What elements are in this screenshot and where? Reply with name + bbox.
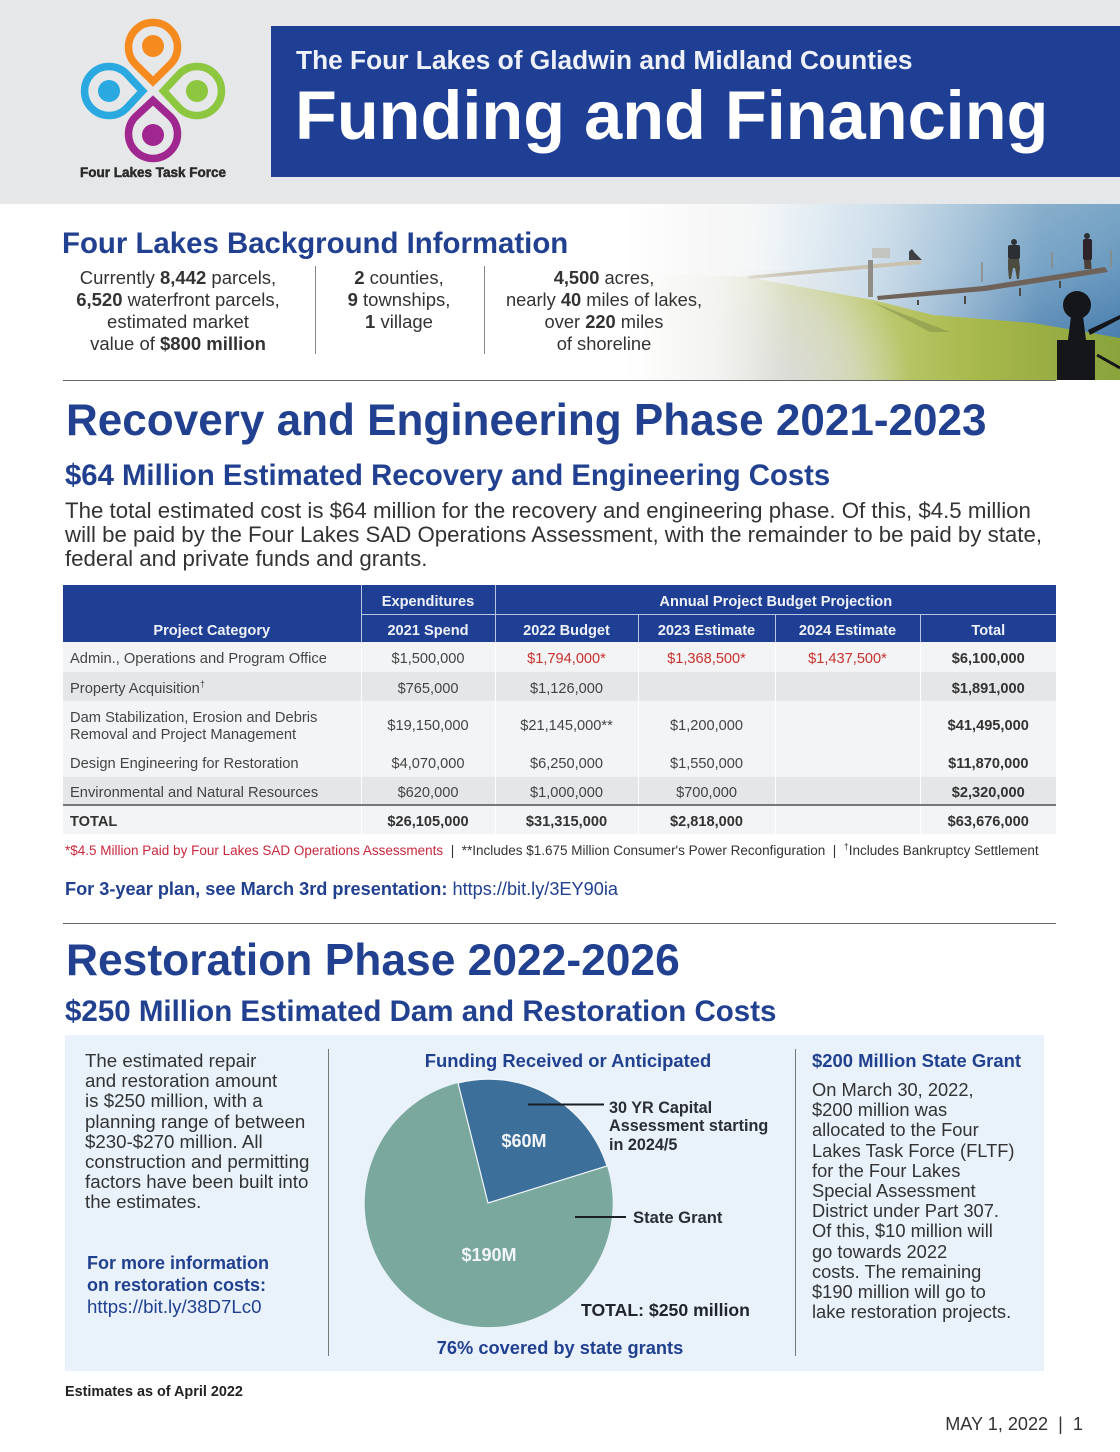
row: design: $11,870,000 bbox=[948, 756, 1028, 772]
foreground post and chain bbox=[1057, 291, 1120, 380]
subheading: restoration costs: $250 Million Estimated Dam and Restoration Costs bbox=[65, 995, 776, 1028]
row: total: $2,818,000 bbox=[670, 814, 743, 830]
text: state grant details: On March 30, 2022, bbox=[812, 1079, 974, 1100]
row: property: $1,126,000 bbox=[530, 680, 603, 696]
row: total: $26,105,000 bbox=[387, 814, 469, 830]
table footnotes: *$4.5 Million Paid by Four Lakes SAD Operations Assessments | **Includes $1.675 Million Consumer's Power Reconfiguration | †Includes Bankruptcy Settlement bbox=[65, 842, 1039, 858]
row: admin: $6,100,000 bbox=[952, 651, 1025, 667]
subtitle: The Four Lakes of Gladwin and Midland Counties bbox=[296, 45, 913, 75]
fisherman left bbox=[1008, 239, 1020, 279]
row: design: $6,250,000 bbox=[530, 756, 603, 772]
text: repair amount: the estimates. bbox=[85, 1191, 201, 1212]
text: repair amount: and restoration amount bbox=[85, 1070, 277, 1091]
callout: capital assessment: Assessment starting bbox=[609, 1117, 768, 1135]
text: state grant details: District under Part 307. bbox=[812, 1200, 999, 1221]
icon: green pin bbox=[164, 66, 221, 116]
text: repair amount: planning range of between bbox=[85, 1111, 305, 1132]
table header row: columns: 2022 Budget bbox=[523, 623, 610, 639]
table header row: columns: Total bbox=[971, 623, 1005, 639]
row: admin: $1,500,000 bbox=[391, 651, 465, 667]
paragraph: recovery description bbox=[65, 498, 1042, 571]
stat: acres: 4,500 acres, bbox=[554, 267, 654, 288]
stat: acres: over 220 miles bbox=[545, 311, 663, 332]
row: environmental: $2,320,000 bbox=[952, 784, 1025, 800]
link: restoration costs: on restoration costs: bbox=[87, 1275, 266, 1295]
stat: counties: 1 village bbox=[365, 311, 433, 332]
row: design bbox=[63, 747, 1056, 777]
near dock bbox=[877, 250, 1111, 305]
stat: acres: of shoreline bbox=[557, 333, 651, 354]
footer: date and page: MAY 1, 2022 | 1 bbox=[945, 1414, 1083, 1434]
pie slice: capital assessment bbox=[458, 1079, 607, 1203]
text: state grant details: Of this, $10 million will bbox=[812, 1220, 993, 1241]
icon: Four Lakes Task Force logo bbox=[80, 18, 227, 180]
row: dam: $19,150,000 bbox=[387, 718, 469, 734]
callout: capital assessment: 30 YR Capital bbox=[609, 1099, 712, 1117]
row: design: $4,070,000 bbox=[391, 756, 465, 772]
stat: parcels: Currently 8,442 parcels, bbox=[80, 267, 276, 288]
table header row: columns: 2024 Estimate bbox=[799, 623, 896, 639]
table header row: groups: Annual Project Budget Projection bbox=[659, 594, 892, 610]
link: 3-year plan: For 3-year plan, see March 3rd presentation: https://bit.ly/3EY90ia bbox=[65, 879, 618, 899]
row: admin bbox=[63, 642, 1056, 672]
text: state grant details: costs. The remaining bbox=[812, 1261, 981, 1282]
heading: background information: Four Lakes Background Information bbox=[62, 227, 568, 260]
table header row: columns bbox=[63, 614, 1056, 642]
row: environmental: Environmental and Natural Resources bbox=[70, 784, 318, 800]
heading: state grant: $200 Million State Grant bbox=[812, 1050, 1021, 1071]
icon: orange pin bbox=[128, 23, 178, 82]
row: environmental: $700,000 bbox=[676, 784, 737, 800]
row: admin: $1,794,000* bbox=[527, 651, 606, 667]
link: restoration costs: https://bit.ly/38D7Lc0 bbox=[87, 1296, 262, 1317]
stat: counties: 9 townships, bbox=[348, 289, 450, 310]
row: design: Design Engineering for Restoration bbox=[70, 756, 299, 772]
link: restoration costs: For more information bbox=[87, 1253, 269, 1273]
total label: TOTAL: $250 million bbox=[581, 1300, 750, 1320]
stat: acres bbox=[506, 267, 702, 354]
row: property: Property Acquisition† bbox=[70, 679, 205, 696]
row: dam bbox=[63, 701, 1056, 747]
table header row: groups: Expenditures bbox=[382, 594, 474, 610]
coverage note: 76% covered by state grants bbox=[437, 1337, 683, 1358]
fisherman right bbox=[1083, 233, 1092, 269]
row: environmental: $1,000,000 bbox=[530, 784, 603, 800]
fade overlay bbox=[620, 204, 795, 380]
row: dam: $21,145,000** bbox=[520, 718, 613, 734]
icon: purple pin bbox=[128, 100, 178, 158]
text: state grant details: Lakes Task Force (FLTF) bbox=[812, 1140, 1014, 1161]
text: state grant details: go towards 2022 bbox=[812, 1241, 947, 1262]
table header row: columns: Project Category bbox=[153, 623, 270, 639]
text: state grant details: lake restoration projects. bbox=[812, 1301, 1011, 1322]
subheading: recovery costs: $64 Million Estimated Recovery and Engineering Costs bbox=[65, 459, 830, 492]
row: design: $1,550,000 bbox=[670, 756, 743, 772]
stat: counties: 2 counties, bbox=[354, 267, 444, 288]
table header row: groups bbox=[63, 585, 1056, 834]
far dock bbox=[747, 248, 922, 297]
row: property bbox=[63, 672, 1056, 701]
photo: lake with docks and fishermen bbox=[674, 204, 1120, 380]
row: admin: Admin., Operations and Program Office bbox=[70, 651, 327, 667]
text: state grant details: $190 million will go to bbox=[812, 1281, 986, 1302]
paragraph: recovery description: federal and private funds and grants. bbox=[65, 546, 427, 571]
table: project budget bbox=[63, 585, 1056, 834]
callout: capital assessment: in 2024/5 bbox=[609, 1136, 677, 1154]
slice label: $190M: $190M bbox=[461, 1245, 517, 1265]
callout: capital assessment bbox=[528, 1099, 768, 1154]
text: repair amount: factors have been built into bbox=[85, 1171, 308, 1192]
chart: funding pie bbox=[364, 1050, 768, 1358]
main title: Funding and Financing bbox=[295, 77, 1048, 154]
table header row: columns: 2021 Spend bbox=[387, 623, 469, 639]
chart title: Funding Received or Anticipated bbox=[425, 1050, 711, 1071]
logo wordmark: Four Lakes Task Force bbox=[80, 165, 227, 180]
note: estimates date: Estimates as of April 2022 bbox=[65, 1384, 243, 1400]
text: state grant details bbox=[812, 1079, 1014, 1322]
row: dam: $41,495,000 bbox=[948, 718, 1029, 734]
stat: parcels: value of $800 million bbox=[90, 333, 266, 354]
grass shore bbox=[620, 272, 1120, 380]
icon: blue pin bbox=[85, 66, 142, 115]
pie slice: state grant bbox=[365, 1083, 613, 1327]
text: state grant details: $200 million was bbox=[812, 1099, 947, 1120]
row: total: $63,676,000 bbox=[948, 814, 1029, 830]
row: property: $765,000 bbox=[398, 680, 458, 696]
row: admin: $1,368,500* bbox=[667, 651, 746, 667]
header band bbox=[0, 0, 1120, 204]
text: repair amount: The estimated repair bbox=[85, 1050, 256, 1071]
row: dam: $1,200,000 bbox=[670, 718, 743, 734]
heading: restoration phase: Restoration Phase 2022-2026 bbox=[66, 936, 680, 985]
stat: acres: nearly 40 miles of lakes, bbox=[506, 289, 702, 310]
row: environmental bbox=[63, 777, 1056, 804]
stat: parcels bbox=[76, 267, 280, 354]
callout: state grant: State Grant bbox=[633, 1208, 723, 1227]
heading: recovery phase: Recovery and Engineering Phase 2021-2023 bbox=[66, 396, 987, 445]
row: total: TOTAL bbox=[70, 814, 117, 830]
stat: parcels: estimated market bbox=[107, 311, 249, 332]
stat: parcels: 6,520 waterfront parcels, bbox=[76, 289, 280, 310]
row: dam: Dam Stabilization, Erosion and Debris bbox=[70, 710, 317, 726]
paragraph: recovery description: The total estimated cost is $64 million for the recovery and engineering phase. Of this, $4.5 million bbox=[65, 498, 1031, 523]
row: total: $31,315,000 bbox=[526, 814, 607, 830]
panel: restoration details bbox=[65, 1035, 1044, 1371]
paragraph: recovery description: will be paid by the Four Lakes SAD Operations Assessment, with the remainder to be paid by state, bbox=[65, 522, 1042, 547]
text: state grant details: Special Assessment bbox=[812, 1180, 976, 1201]
row: environmental: $620,000 bbox=[398, 784, 458, 800]
link: restoration costs bbox=[87, 1253, 269, 1317]
table header row: columns: 2023 Estimate bbox=[658, 623, 755, 639]
row: total bbox=[63, 805, 1056, 834]
slice label: $60M: $60M bbox=[501, 1131, 547, 1151]
shadow on grass bbox=[872, 302, 950, 332]
text: state grant details: for the Four Lakes bbox=[812, 1160, 960, 1181]
title banner bbox=[271, 26, 1120, 177]
text: repair amount: $230-$270 million. All bbox=[85, 1131, 263, 1152]
stat: counties bbox=[348, 267, 450, 332]
row: admin: $1,437,500* bbox=[808, 651, 887, 667]
text: repair amount bbox=[85, 1050, 309, 1212]
text: repair amount: construction and permitting bbox=[85, 1151, 309, 1172]
row: property: $1,891,000 bbox=[952, 680, 1025, 696]
text: repair amount: is $250 million, with a bbox=[85, 1090, 263, 1111]
text: state grant details: allocated to the Four bbox=[812, 1119, 979, 1140]
row: dam: Removal and Project Management bbox=[70, 726, 296, 742]
